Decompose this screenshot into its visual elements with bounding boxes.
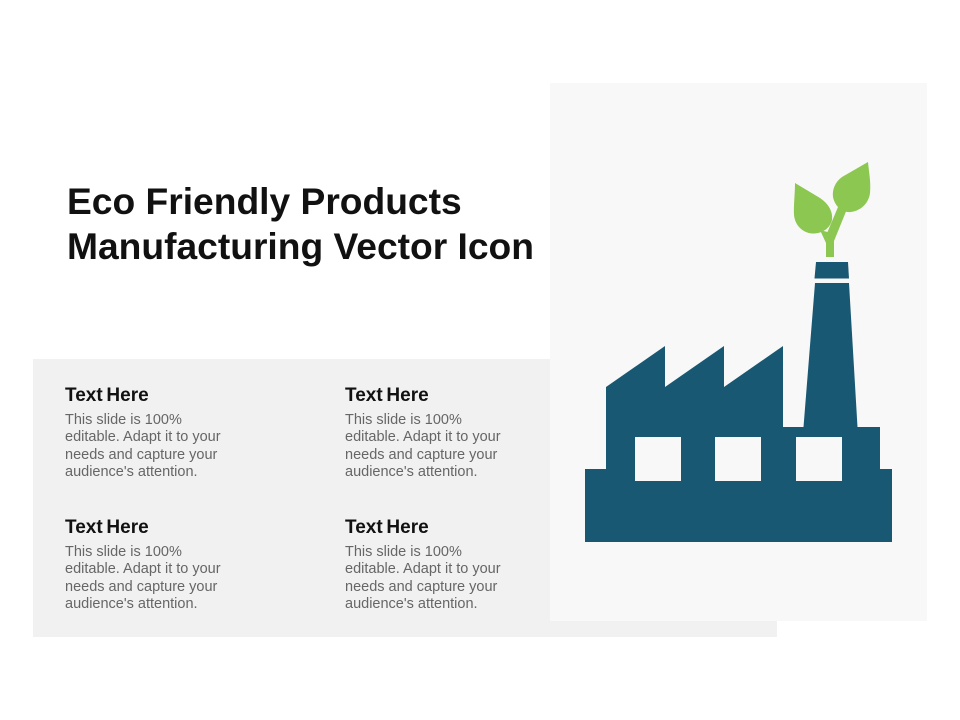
text block: bottom left: audience's attention. [65, 596, 198, 612]
icon: factory building [585, 283, 892, 542]
panel: grey text background [33, 359, 777, 637]
text block: top right: audience's attention. [345, 464, 478, 480]
text block: bottom right: Text Here [345, 517, 429, 538]
title [67, 180, 534, 267]
text block: top left: editable. Adapt it to your [65, 429, 221, 445]
icon: sprout stem [820, 207, 847, 257]
text block: top right: needs and capture your [345, 447, 497, 463]
text block: top left [65, 385, 221, 480]
text block: bottom right: audience's attention. [345, 596, 478, 612]
text block: bottom left: needs and capture your [65, 579, 217, 595]
text block: top right: This slide is 100% [345, 412, 462, 428]
text block: bottom left: editable. Adapt it to your [65, 561, 221, 577]
text block: bottom right: editable. Adapt it to your [345, 561, 501, 577]
text block: top left: needs and capture your [65, 447, 217, 463]
text block: top left: Text Here [65, 385, 149, 406]
panel: illustration background [550, 83, 927, 621]
icon: chimney cap [814, 262, 849, 278]
text block: top right [345, 385, 501, 480]
text block: bottom left: Text Here [65, 517, 149, 538]
text block: bottom right: needs and capture your [345, 579, 497, 595]
icon: left leaf [794, 183, 832, 234]
text block: bottom left: This slide is 100% [65, 544, 182, 560]
text block: top left: audience's attention. [65, 464, 198, 480]
title: Eco Friendly Products [67, 180, 462, 222]
text block: top left: This slide is 100% [65, 412, 182, 428]
text block: bottom right [345, 517, 501, 612]
text block: bottom right: This slide is 100% [345, 544, 462, 560]
text block: bottom left [65, 517, 221, 612]
text block: top right: editable. Adapt it to your [345, 429, 501, 445]
text block: top right: Text Here [345, 385, 429, 406]
icon: right leaf [833, 162, 870, 212]
title: Manufacturing Vector Icon [67, 225, 534, 267]
